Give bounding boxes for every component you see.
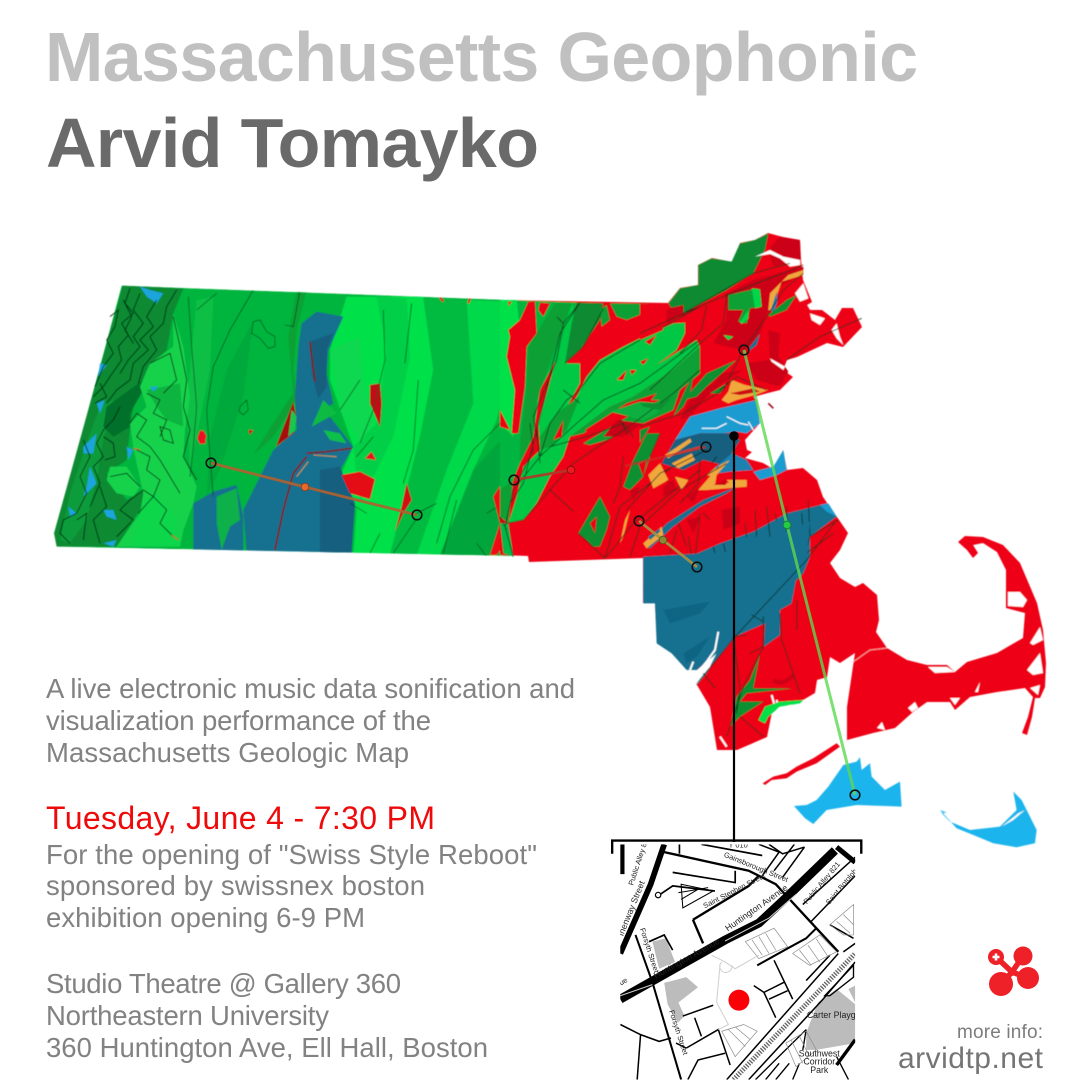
top strip dark green patches [610,303,657,320]
red outcrops [276,402,297,447]
title [45,18,918,182]
street map inset: ue [617,975,629,987]
street map inset: Forsyth Street [638,927,661,974]
map: southeast peninsula and islands [643,520,1037,847]
rail corridor [727,954,855,1080]
orange near harbor [722,380,768,403]
map bracket [612,841,861,854]
map: central green and red bands [500,300,700,558]
event date: Tuesday, June 4 - 7:30 PM [46,800,435,836]
street map inset: Forsyth Street [667,1009,690,1056]
venue address: 360 Huntington Ave, Ell Hall, Boston [46,1032,488,1063]
thin pale pathways [620,894,796,1030]
venue marker [728,990,749,1011]
title: Massachusetts Geophonic [45,18,918,96]
lower green patches [578,497,610,547]
event details: For the opening of "Swiss Style Reboot" [46,839,537,870]
street map inset: Ihenway Street [616,879,647,937]
street map inset: Gainsborough Street [723,850,790,884]
street map inset: Corridor [803,1057,835,1067]
description text: visualization performance of the [46,705,431,736]
street map inset: Southwest [799,1049,840,1059]
street map inset [612,841,861,1080]
street map inset: Huntington Avenue [723,883,790,933]
map: far-west region [54,286,207,547]
street map inset: Park [810,1065,829,1075]
venue address: Studio Theatre @ Gallery 360 [46,968,401,999]
dark red blobs [630,480,740,533]
Connecticut valley blue [243,312,355,566]
southern blue bedrock [643,522,810,685]
Nantucket [940,792,1037,847]
big diagonal green band [508,323,700,523]
orange formations [648,438,747,490]
description text [46,673,575,768]
more info link: more info: [957,1022,1043,1043]
map: Cape Cod coastal marshes [853,592,1043,730]
event details [46,839,537,933]
hatched buildings [722,904,854,1067]
more info link [898,1022,1044,1075]
lower blue bedrock [643,503,837,600]
street map inset: Saint Botolph [824,867,859,906]
southern fault lines [697,520,837,737]
thick roads [620,850,835,999]
street map inset: Public Alley 821 [801,860,842,906]
event details: exhibition opening 6-9 PM [46,902,365,933]
sonification path: west [206,458,422,520]
gray blocks [652,938,675,969]
map: Boston harbor and southern basin [627,400,838,600]
callout line and venue marker [729,431,739,842]
Elizabeth Islands [763,743,840,785]
Martha's Vineyard [794,757,902,824]
street map inset: Y 010 [728,841,748,850]
street map inset: Public Alley 8 [626,842,649,887]
sonification path: olive [634,516,702,572]
blue pocket [193,485,243,552]
blue diagonal band [645,487,737,548]
green formations [730,653,793,727]
geologic map of Massachusetts [54,233,1046,847]
map: northeast region [640,233,862,443]
event details: sponsored by swissnex boston [46,870,425,901]
street labels: Huntington Avenue [652,936,722,981]
description text: Massachusetts Geologic Map [46,737,409,768]
bright blue flecks [68,287,163,547]
map: mainland east and Cape Cod base [500,233,1046,750]
subtitle: artist name: Arvid Tomayko [46,104,539,182]
contour lines [197,290,300,497]
white coastal inlets [690,632,790,747]
street map inset: Saint Stephen Street [702,871,767,910]
venue address: Northeastern University [46,1000,329,1031]
more info link: arvidtp.net [898,1042,1044,1075]
street map inset: Carter Playg [807,1010,856,1020]
sonification path: green [739,345,860,800]
icon: red swiss cross node logo [988,946,1039,996]
white inlets [755,250,843,370]
sonification path: central [509,442,711,485]
second dark green strip [570,347,700,445]
venue address [46,968,488,1063]
description text: A live electronic music data sonification and [46,673,575,704]
map: central-west region [55,286,510,566]
